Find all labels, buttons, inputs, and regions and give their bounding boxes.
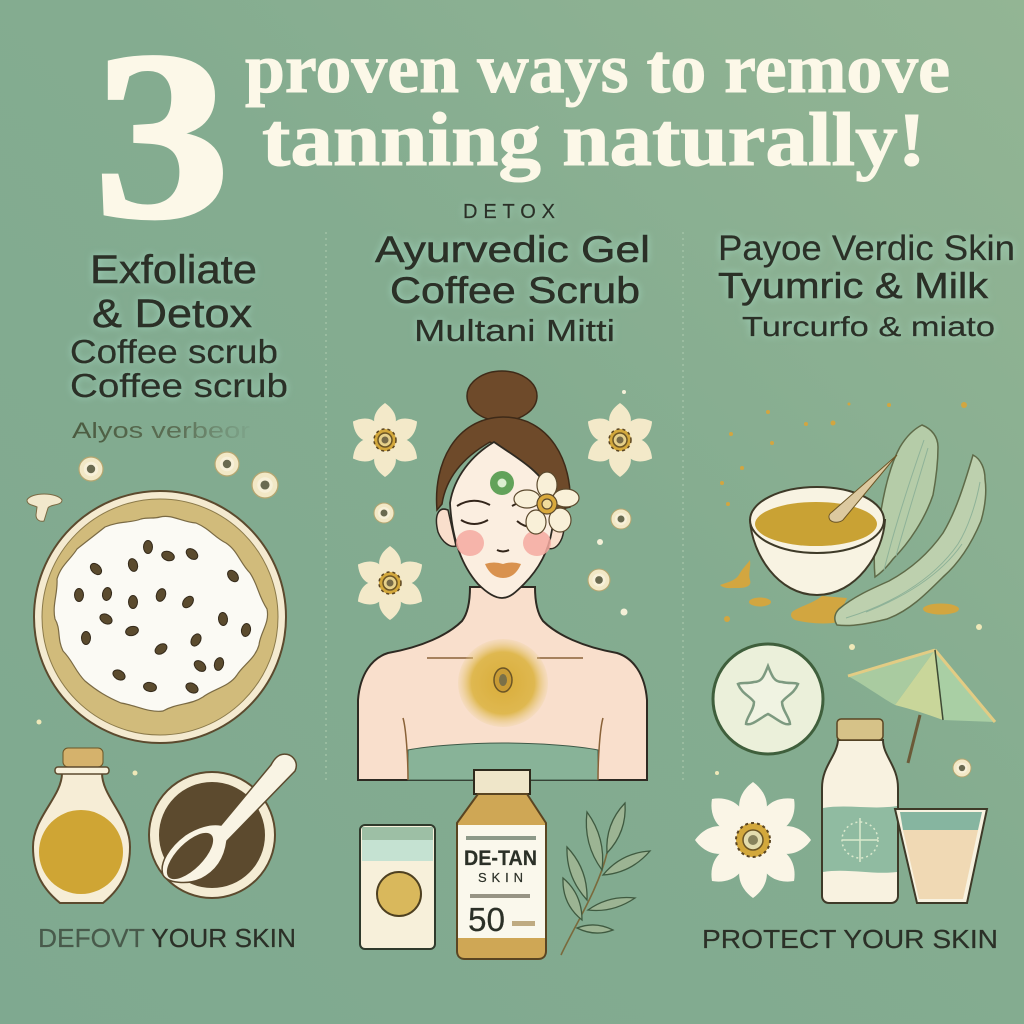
icon: glass of peach drink	[895, 809, 987, 903]
icon: scrub bowl	[34, 491, 286, 743]
column 2 heading: Ayurvedic Gel	[375, 229, 650, 270]
icon: de-tan bottle: 50	[468, 901, 505, 938]
ears	[436, 509, 564, 549]
icon: coffee bowl and spoon	[149, 754, 296, 898]
icon: green sprig	[561, 803, 650, 955]
icon: flower bottom right	[695, 782, 811, 898]
icon: de-tan bottle: DE-TAN	[464, 847, 537, 870]
hair flower	[514, 472, 579, 534]
column 1 heading	[70, 248, 288, 404]
brow and eyes	[457, 501, 540, 527]
icon: flowers around woman	[348, 390, 657, 620]
column 3 heading: Turcurfo & miato	[742, 311, 995, 342]
column 3 heading	[718, 229, 1015, 342]
title	[94, 2, 950, 268]
icon: aloe leaves	[835, 425, 986, 626]
title line 1: proven ways to remove	[245, 31, 950, 108]
icon: cucumber slice	[713, 644, 823, 754]
title numeral 3: 3	[94, 2, 230, 268]
icon: milk bottle	[822, 719, 898, 903]
hair	[437, 417, 570, 512]
title line 2: tanning naturally!	[262, 98, 926, 182]
face	[450, 442, 554, 598]
icon: scattered coffee rings	[27, 452, 278, 776]
golden patch	[458, 639, 548, 727]
column 1 heading: & Detox	[92, 292, 252, 336]
third eye mark	[490, 471, 514, 495]
icon: glass of milk	[360, 825, 435, 949]
column 3 heading: Payoe Verdic Skin	[718, 229, 1015, 268]
coffee beans	[74, 540, 252, 695]
icon: umbrella	[848, 650, 995, 777]
column 3 heading: Tyumric & Milk	[718, 265, 989, 306]
caption: column 1: DEFOVT YOUR SKIN	[38, 923, 296, 953]
icon: de-tan bottle	[457, 770, 546, 959]
icon: de-tan bottle: SKIN	[478, 870, 523, 885]
column 1 heading: Coffee scrub	[70, 333, 278, 370]
caption: column 3: PROTECT YOUR SKIN	[702, 924, 998, 954]
nose	[497, 550, 509, 552]
column 1 heading: Coffee scrub	[70, 367, 288, 404]
hair bun	[467, 371, 537, 421]
faded sub-label: Alyos verbeor	[72, 418, 250, 443]
icon: gold oil bottle	[33, 748, 130, 903]
column 2 heading: Multani Mitti	[414, 313, 615, 348]
towel	[408, 743, 598, 780]
illustration: woman with flowers	[358, 371, 647, 780]
column 2 heading: DETOX	[463, 201, 555, 223]
column 2 heading: Coffee Scrub	[390, 270, 640, 311]
woman body	[358, 587, 647, 780]
icon: turmeric milk bowl	[750, 455, 897, 595]
mouth	[485, 562, 521, 578]
cheeks	[456, 530, 484, 556]
column 1 heading: Exfoliate	[90, 248, 257, 292]
icon: turmeric spills and sparkles	[715, 402, 982, 775]
column 2 heading	[375, 201, 650, 348]
